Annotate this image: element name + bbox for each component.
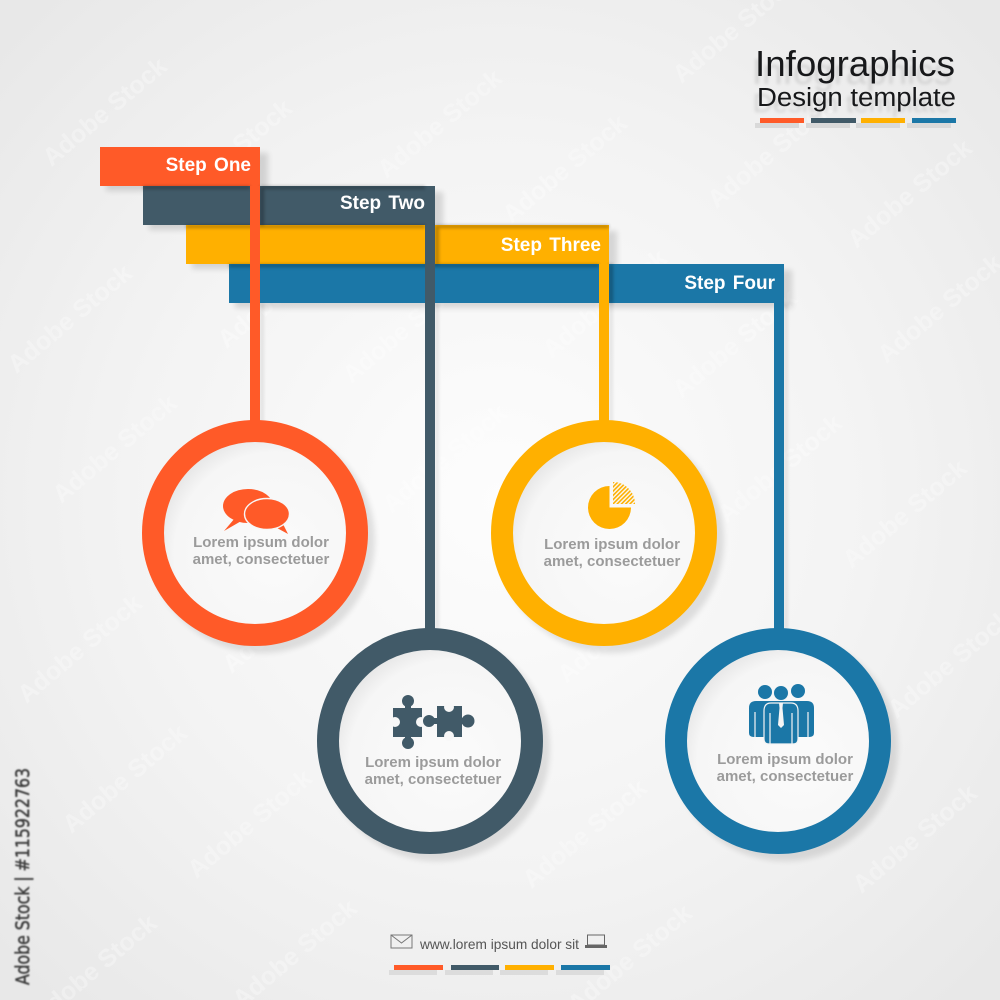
ribbon: step one: Step One xyxy=(166,155,251,176)
circle: step one xyxy=(149,427,375,653)
watermark pattern: Adobe Stock xyxy=(702,94,837,214)
watermark pattern: Adobe Stock xyxy=(372,64,507,184)
connector lines xyxy=(250,186,788,633)
icon: team of people xyxy=(749,684,814,744)
connector: step one xyxy=(250,186,260,426)
footer url: www.lorem ipsum dolor sit xyxy=(419,937,579,952)
ribbon shadows xyxy=(106,153,792,308)
icon: puzzle pieces xyxy=(390,695,474,749)
watermark pattern: Adobe Stock xyxy=(212,234,347,354)
title: Infographics xyxy=(755,43,955,84)
title block xyxy=(752,43,956,128)
watermark pattern: Adobe Stock xyxy=(47,389,182,509)
watermark pattern: Adobe Stock xyxy=(517,774,652,894)
footer xyxy=(389,935,610,975)
title colour bars xyxy=(755,118,956,128)
watermark pattern: Adobe Stock xyxy=(37,52,172,172)
ribbon: step two xyxy=(143,186,435,225)
watermark pattern: Adobe Stock xyxy=(2,259,137,379)
watermark pattern: Adobe Stock xyxy=(847,779,982,899)
ribbon: step two: Step Two xyxy=(340,193,425,214)
text: lorem: Lorem ipsum dolor xyxy=(717,751,853,768)
icon: laptop xyxy=(585,935,607,948)
watermark pattern: Adobe Stock xyxy=(497,109,632,229)
watermark pattern: Adobe Stock xyxy=(377,399,512,519)
watermark pattern: Adobe Stock xyxy=(12,589,147,709)
watermark pattern: Adobe Stock xyxy=(842,134,977,254)
icon: pie chart xyxy=(588,482,635,529)
text: lorem: Lorem ipsum dolor xyxy=(193,534,329,551)
icon: speech bubbles xyxy=(223,489,290,534)
connector: step three xyxy=(599,264,609,426)
watermark pattern: Adobe Stock xyxy=(837,454,972,574)
title shadow text xyxy=(752,51,952,118)
watermark pattern: Adobe Stock xyxy=(162,94,297,214)
text: lorem: amet, consectetuer xyxy=(544,553,681,570)
connector: step four xyxy=(774,303,784,633)
watermark pattern: Adobe Stock xyxy=(217,559,352,679)
watermark pattern: Adobe Stock xyxy=(552,569,687,689)
watermark pattern: Adobe Stock xyxy=(337,269,472,389)
ribbon: step four: Step Four xyxy=(684,273,776,294)
watermark pattern: Adobe Stock xyxy=(667,284,802,404)
stock credit: Adobe Stock | #115922763 xyxy=(13,768,34,985)
step ribbons xyxy=(100,147,792,308)
footer colour bars xyxy=(389,965,610,975)
ribbon: step three xyxy=(186,225,609,264)
text: lorem: Lorem ipsum dolor xyxy=(365,754,501,771)
watermark pattern: Adobe Stock xyxy=(182,764,317,884)
ribbon: step three: Step Three xyxy=(501,235,601,256)
title shadow text: Infographics xyxy=(752,51,952,92)
circle: step two xyxy=(324,635,550,861)
text: lorem: amet, consectetuer xyxy=(365,771,502,788)
connector shadows xyxy=(260,303,788,629)
text: lorem: Lorem ipsum dolor xyxy=(544,536,680,553)
subtitle: Design template xyxy=(757,84,956,112)
watermark pattern: Adobe Stock xyxy=(57,719,192,839)
watermark pattern: Adobe Stock xyxy=(712,409,847,529)
connector: step two xyxy=(425,225,435,633)
circle: step four xyxy=(672,635,898,861)
watermark pattern: Adobe Stock xyxy=(537,244,672,364)
icon: envelope xyxy=(391,935,412,948)
text: lorem: amet, consectetuer xyxy=(717,768,854,785)
ribbon: step four xyxy=(229,264,784,303)
title shadow text: Design template xyxy=(753,88,951,118)
circle: step three xyxy=(498,427,724,653)
text: lorem: amet, consectetuer xyxy=(193,551,330,568)
ribbon: step one xyxy=(100,147,260,186)
ribbon inner shadows xyxy=(143,186,613,303)
